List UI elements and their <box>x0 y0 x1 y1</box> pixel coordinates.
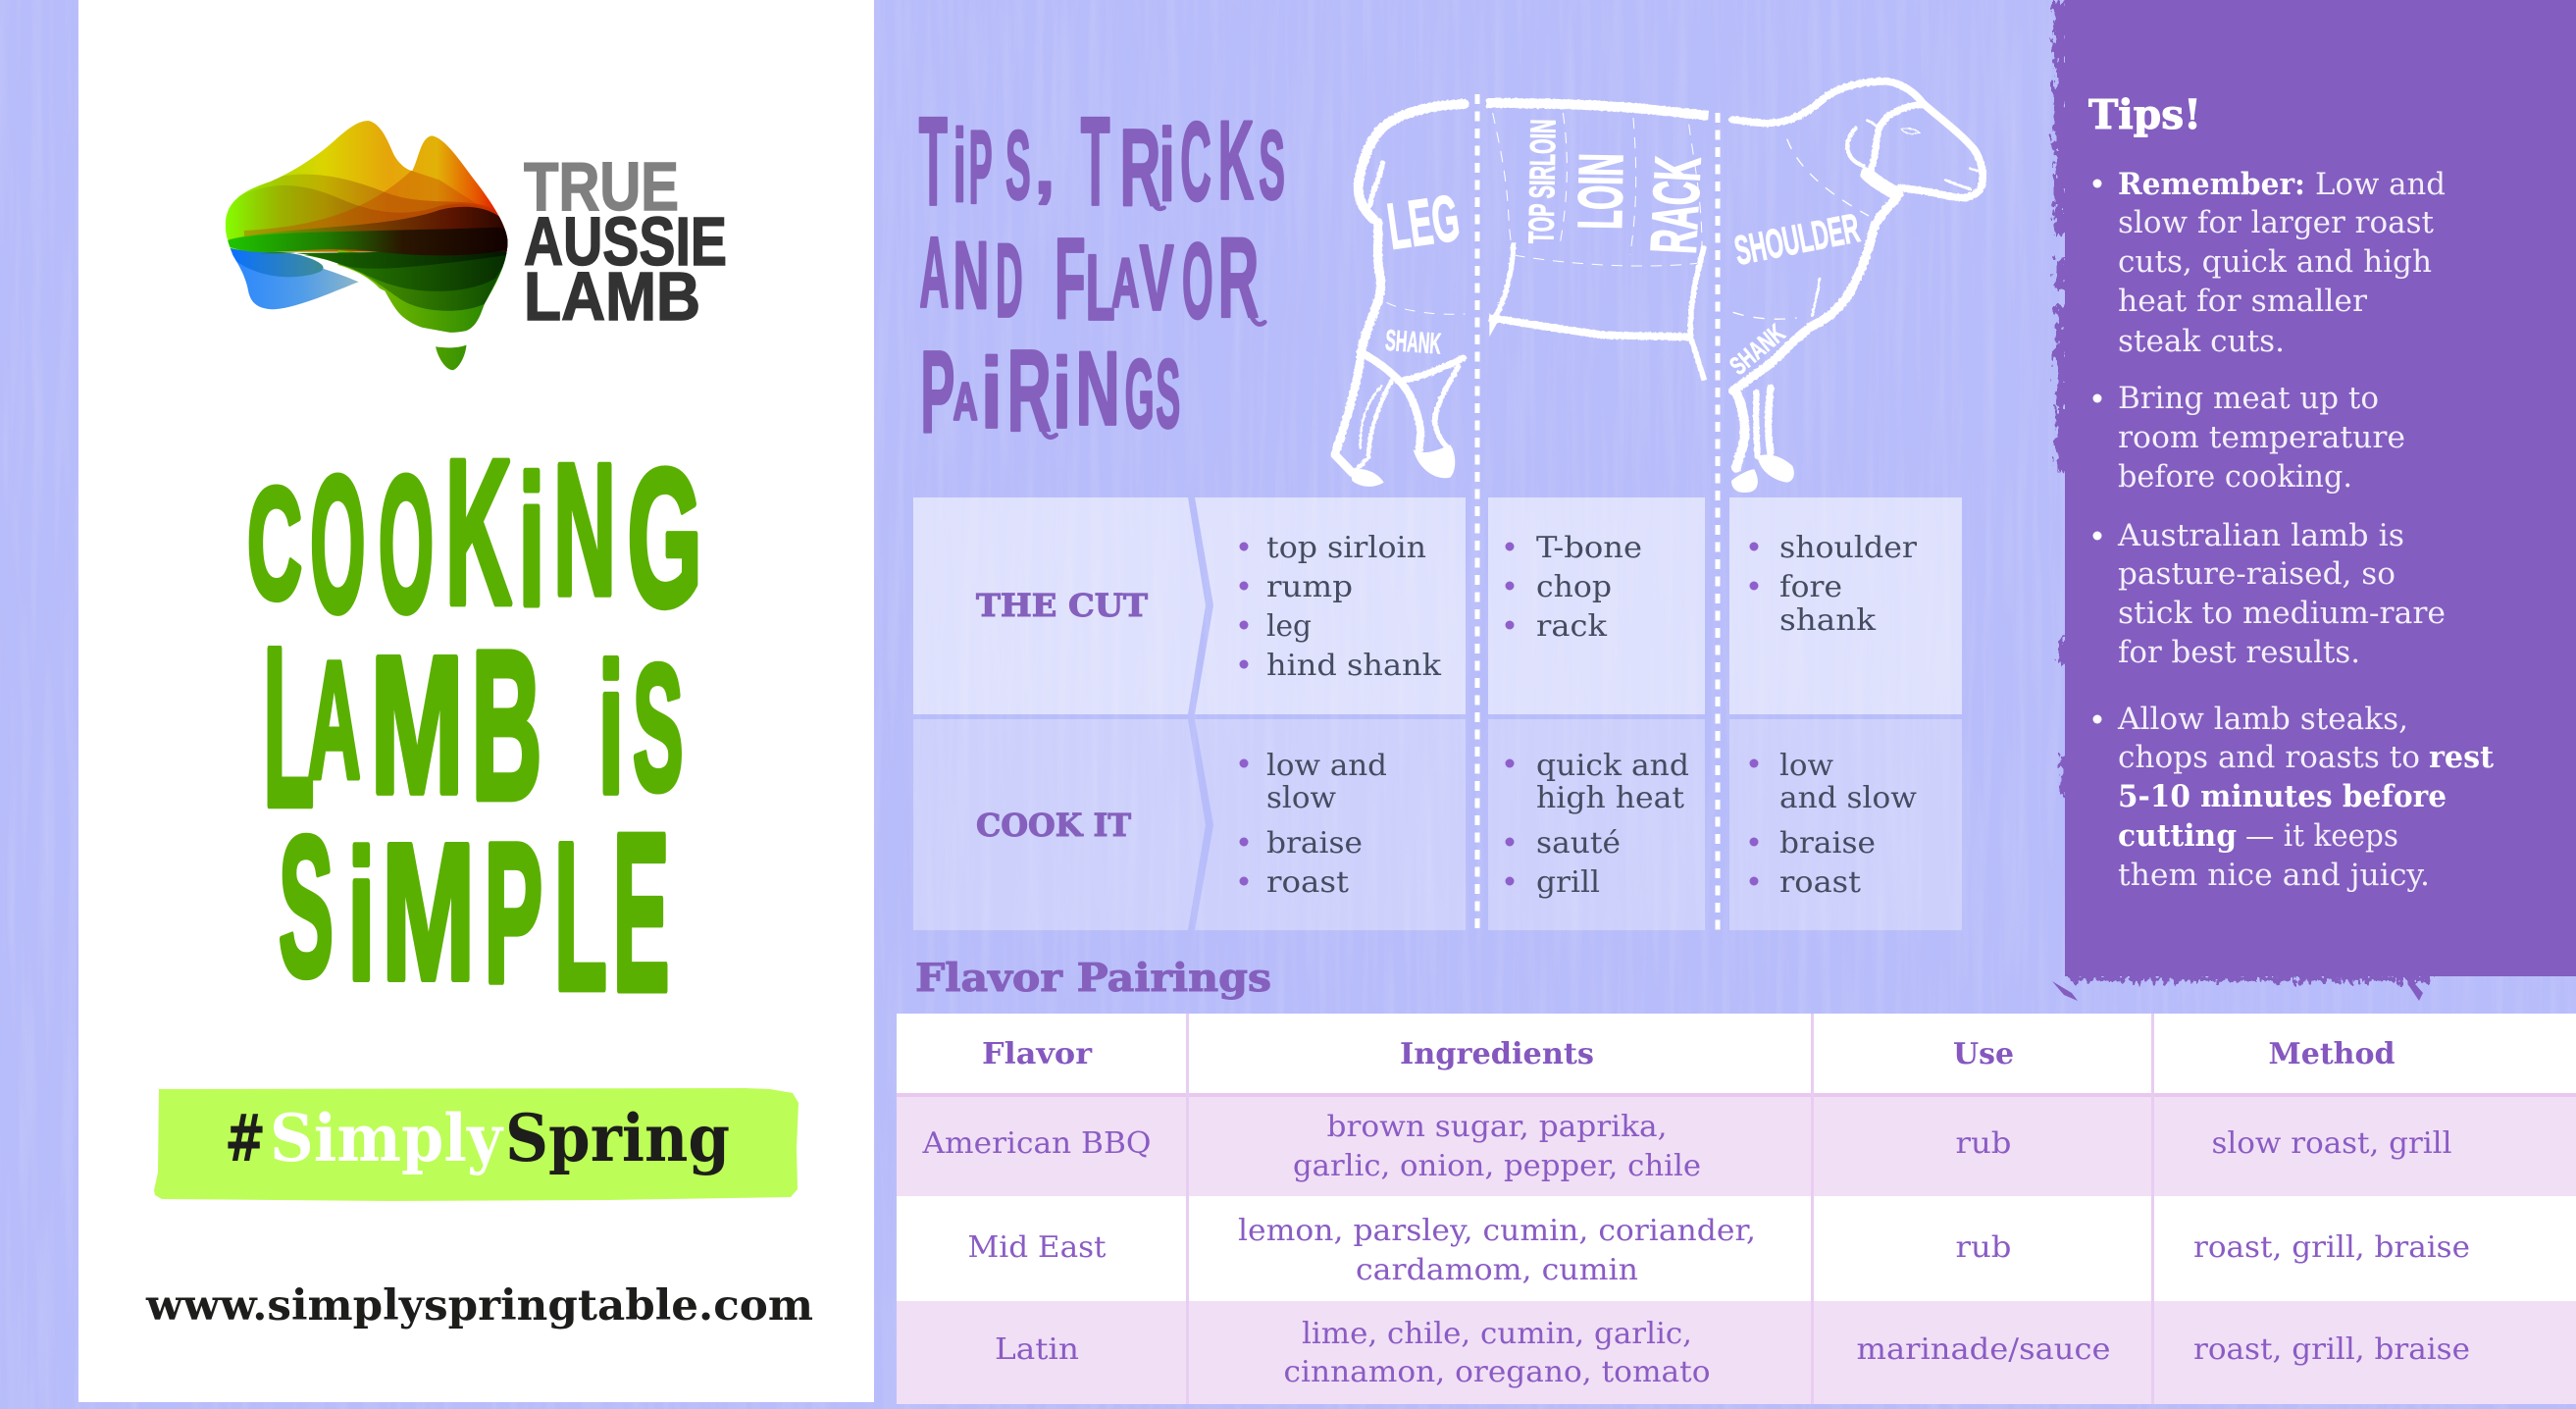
tip: resting: 5-10 minutes before <box>2118 779 2447 814</box>
tip: pasture raised: pasture-raised, so <box>2118 556 2396 592</box>
logo: True Aussie Lamb <box>222 115 727 370</box>
heading: Tips, Tricks and Flavor Pairings: P <box>969 109 993 225</box>
sheep front section and head <box>1724 81 1983 493</box>
text: leg cuts: hind shank <box>1266 649 1442 683</box>
title: Cooking Lamb is Simple: G <box>627 429 702 648</box>
title: Cooking Lamb is Simple: i <box>347 813 375 1018</box>
title: Cooking Lamb is Simple: S <box>633 629 684 828</box>
sheep middle section: LOIN <box>1567 153 1636 230</box>
tip: remember: heat for smaller <box>2118 284 2367 319</box>
title: Cooking Lamb is Simple: L <box>554 799 607 1034</box>
tip: resting: them nice and juicy. <box>2118 858 2430 893</box>
title: Cooking Lamb is Simple: O <box>379 437 434 652</box>
tip: resting: — it keeps <box>2245 818 2398 854</box>
table header: Use <box>1953 1037 2014 1071</box>
panel: cuts and cooking grid <box>913 94 1962 932</box>
heading: Tips, Tricks and Flavor Pairings: V <box>1140 227 1174 331</box>
row: Latin: cinnamon, oregano, tomato <box>1283 1355 1711 1389</box>
text: shoulder cuts <box>1779 531 1918 638</box>
heading: Tips, Tricks and Flavor Pairings: R <box>1120 106 1160 229</box>
row: Mid East: Mid East <box>967 1230 1107 1265</box>
row: Mid East: cardamom, cumin <box>1356 1253 1638 1287</box>
row: the cut: THE CUT <box>976 587 1148 624</box>
text: loin cuts: T-bone <box>1536 531 1642 565</box>
tip: pasture raised: Australian lamb is <box>2117 518 2404 553</box>
logo wordmark: LAMB <box>524 258 700 335</box>
row: American BBQ: American BBQ <box>921 1126 1152 1161</box>
row: Mid East: rub <box>1956 1230 2011 1265</box>
title: Cooking Lamb is Simple: A <box>308 627 361 812</box>
hashtag: brush banner <box>154 1088 799 1201</box>
heading: Tips, Tricks and Flavor Pairings: D <box>996 221 1023 339</box>
title: Cooking Lamb is Simple: K <box>445 417 512 648</box>
heading: Tips, Tricks and Flavor Pairings: L <box>1086 236 1115 340</box>
text: loin cooking <box>1536 749 1689 900</box>
logo wordmark <box>524 148 727 335</box>
dashed cut dividers <box>1477 94 1718 932</box>
heading: Tips, Tricks and Flavor Pairings: T <box>919 91 948 232</box>
heading: Tips, Tricks and Flavor Pairings: i <box>1053 339 1071 449</box>
table header <box>982 1037 2396 1071</box>
tip: pasture raised: for best results. <box>2118 635 2360 670</box>
row: cook it: COOK IT <box>976 807 1131 844</box>
heading: Tips, Tricks and Flavor Pairings: N <box>953 222 989 329</box>
tip: remember: steak cuts. <box>2118 324 2285 359</box>
row: Latin: roast, grill, braise <box>2193 1332 2470 1367</box>
row: American BBQ: garlic, onion, pepper, chile <box>1293 1149 1701 1183</box>
text: S <box>1259 111 1285 220</box>
tip: room temperature <box>2118 381 2405 495</box>
row: the cut <box>913 497 1962 714</box>
heading: Tips, Tricks and Flavor Pairings: S <box>1156 340 1180 449</box>
text: leg cooking: low and <box>1266 749 1387 783</box>
logo wordmark: TRUE <box>524 148 679 225</box>
text: leg cuts: rump <box>1266 570 1353 604</box>
tip: pasture raised <box>2117 518 2446 670</box>
heading: Tips, Tricks and Flavor Pairings: A <box>1111 243 1140 321</box>
tip: room temperature: before cooking. <box>2118 459 2352 495</box>
row: Mid East <box>967 1214 2470 1287</box>
sheep middle section <box>1489 103 1714 378</box>
tip: room temperature: room temperature <box>2118 420 2405 455</box>
heading: Tips, Tricks and Flavor Pairings: N <box>1076 329 1120 446</box>
heading: Tips, Tricks and Flavor Pairings: i <box>981 339 1003 449</box>
text: leg cooking: roast <box>1266 865 1349 900</box>
hashtag: brush banner: Spring <box>505 1100 730 1176</box>
title: Cooking Lamb is Simple: O <box>310 437 366 652</box>
sheep front section and head: SHANK <box>1724 318 1790 381</box>
heading: Tips, Tricks and Flavor Pairings: P <box>920 328 954 458</box>
title: Cooking Lamb is Simple: S <box>279 796 334 1018</box>
tip: remember: cuts, quick and high <box>2118 244 2432 280</box>
row: Latin <box>995 1317 2470 1389</box>
text: shoulder cooking: roast <box>1779 865 1861 900</box>
title: Cooking Lamb is Simple: B <box>471 606 542 844</box>
sheep front section and head: SHOULDER <box>1730 204 1863 274</box>
text: loin cooking: sauté <box>1536 826 1621 861</box>
tip: remember: Remember: <box>2118 167 2305 202</box>
text: loin cooking: high heat <box>1536 781 1684 815</box>
website url: www.simplyspringtable.com <box>145 1281 813 1331</box>
tip: room temperature: Bring meat up to <box>2118 381 2379 416</box>
tips heading: Tips! <box>2088 91 2201 138</box>
text: leg cooking: slow <box>1266 781 1336 815</box>
heading: Tips, Tricks and Flavor Pairings: F <box>1055 214 1086 342</box>
hashtag: brush banner: Simply <box>270 1100 504 1176</box>
text: leg cuts: leg <box>1266 609 1312 644</box>
tip: resting: Allow lamb steaks, <box>2117 702 2408 737</box>
text: shoulder cooking: low <box>1779 749 1833 783</box>
row: Latin: marinade/sauce <box>1856 1332 2111 1367</box>
text: loin cooking: grill <box>1536 865 1600 900</box>
text: shoulder cuts: shoulder <box>1779 531 1918 565</box>
tip: resting: chops and roasts to <box>2118 740 2420 775</box>
text: leg cooking: braise <box>1266 826 1363 861</box>
title: Cooking Lamb is Simple: N <box>553 425 616 634</box>
heading: Tips, Tricks and Flavor Pairings: O <box>1182 222 1213 341</box>
sheep rear section: SHANK <box>1384 325 1442 361</box>
text: leg cuts <box>1266 531 1442 683</box>
text: loin cuts: chop <box>1536 570 1612 604</box>
logo wordmark: AUSSIE <box>524 203 727 280</box>
title: Cooking Lamb is Simple: M <box>371 616 464 834</box>
tip: pasture raised: stick to medium-rare <box>2118 596 2446 631</box>
heading: Tips, Tricks and Flavor Pairings: A <box>919 216 949 328</box>
heading: Tips, Tricks and Flavor Pairings: C <box>1180 100 1211 225</box>
tip: resting: rest <box>2429 740 2495 775</box>
heading: Tips, Tricks and Flavor Pairings: i <box>953 109 966 224</box>
title: Cooking Lamb is Simple: M <box>382 804 475 1020</box>
sheep rear section <box>1335 104 1465 487</box>
row: Mid East: roast, grill, braise <box>2193 1230 2470 1265</box>
text: loin cuts <box>1536 531 1642 644</box>
title: Cooking Lamb is Simple: P <box>485 803 542 1024</box>
row: American BBQ: slow roast, grill <box>2211 1126 2452 1161</box>
heading: Tips, Tricks and Flavor Pairings: S <box>1005 111 1031 220</box>
text: loin cuts: rack <box>1536 609 1608 644</box>
text: shoulder cooking: and slow <box>1779 781 1917 815</box>
title: Cooking Lamb is Simple: i <box>518 439 545 645</box>
panel: left white branding <box>78 0 874 1402</box>
row: American BBQ <box>921 1110 2452 1183</box>
text: shoulder cuts: fore <box>1779 570 1842 604</box>
heading: Tips, Tricks and Flavor Pairings: T <box>1081 91 1110 232</box>
tip: resting <box>2117 702 2495 893</box>
heading: flavor pairings: Flavor Pairings <box>915 956 1271 1001</box>
title: Cooking Lamb is Simple: L <box>263 600 314 854</box>
tip: remember: slow for larger roast <box>2118 205 2435 240</box>
heading: Tips, Tricks and Flavor Pairings: A <box>953 372 978 431</box>
list bullets <box>1240 542 1758 885</box>
hashtag: brush banner: # <box>225 1100 266 1176</box>
heading: Tips, Tricks and Flavor Pairings: i <box>1159 108 1175 222</box>
text: loin cooking: quick and <box>1536 749 1689 783</box>
icon: Australia map <box>222 115 514 370</box>
table: flavor pairings <box>897 1014 2576 1404</box>
tip: resting: cutting <box>2118 818 2237 854</box>
text: shoulder cooking <box>1779 749 1917 900</box>
text: leg cooking <box>1266 749 1387 900</box>
heading: Tips, Tricks and Flavor Pairings: R <box>1218 214 1259 341</box>
table header: Flavor <box>982 1037 1093 1071</box>
sheep rear section: LEG <box>1383 182 1464 264</box>
heading: Tips, Tricks and Flavor Pairings <box>919 91 1285 458</box>
heading: Tips, Tricks and Flavor Pairings: , <box>1035 129 1055 209</box>
table header: Ingredients <box>1400 1037 1594 1071</box>
row: American BBQ: brown sugar, paprika, <box>1326 1110 1668 1144</box>
text: leg cuts: top sirloin <box>1266 531 1426 565</box>
title: Cooking Lamb is Simple: E <box>613 787 670 1038</box>
title: Cooking Lamb is Simple: C <box>247 455 302 631</box>
row: Mid East: lemon, parsley, cumin, coriander, <box>1238 1214 1756 1248</box>
panel: tips <box>2052 0 2576 1001</box>
row: Latin: lime, chile, cumin, garlic, <box>1302 1317 1692 1351</box>
table header: Method <box>2268 1037 2396 1071</box>
heading: Tips, Tricks and Flavor Pairings: G <box>1125 340 1155 449</box>
sheep middle section: RACK <box>1636 155 1714 255</box>
text: shoulder cuts: shank <box>1779 603 1877 638</box>
row: cook it <box>913 719 1962 930</box>
heading: Tips, Tricks and Flavor Pairings: R <box>1007 327 1052 456</box>
illustration: lamb butcher diagram <box>1335 81 1983 493</box>
heading: Tips, Tricks and Flavor Pairings: K <box>1218 98 1254 223</box>
bullets <box>2093 179 2101 724</box>
tip: remember <box>2118 167 2446 359</box>
row: Latin: Latin <box>995 1332 1079 1367</box>
title: Cooking Lamb is Simple <box>247 417 702 1038</box>
sheep middle section: TOP SIRLOIN <box>1520 119 1564 243</box>
row: American BBQ: rub <box>1956 1126 2011 1161</box>
tip: remember: Low and <box>2315 167 2446 202</box>
text: shoulder cooking: braise <box>1779 826 1876 861</box>
title: Cooking Lamb is Simple: i <box>598 627 624 832</box>
